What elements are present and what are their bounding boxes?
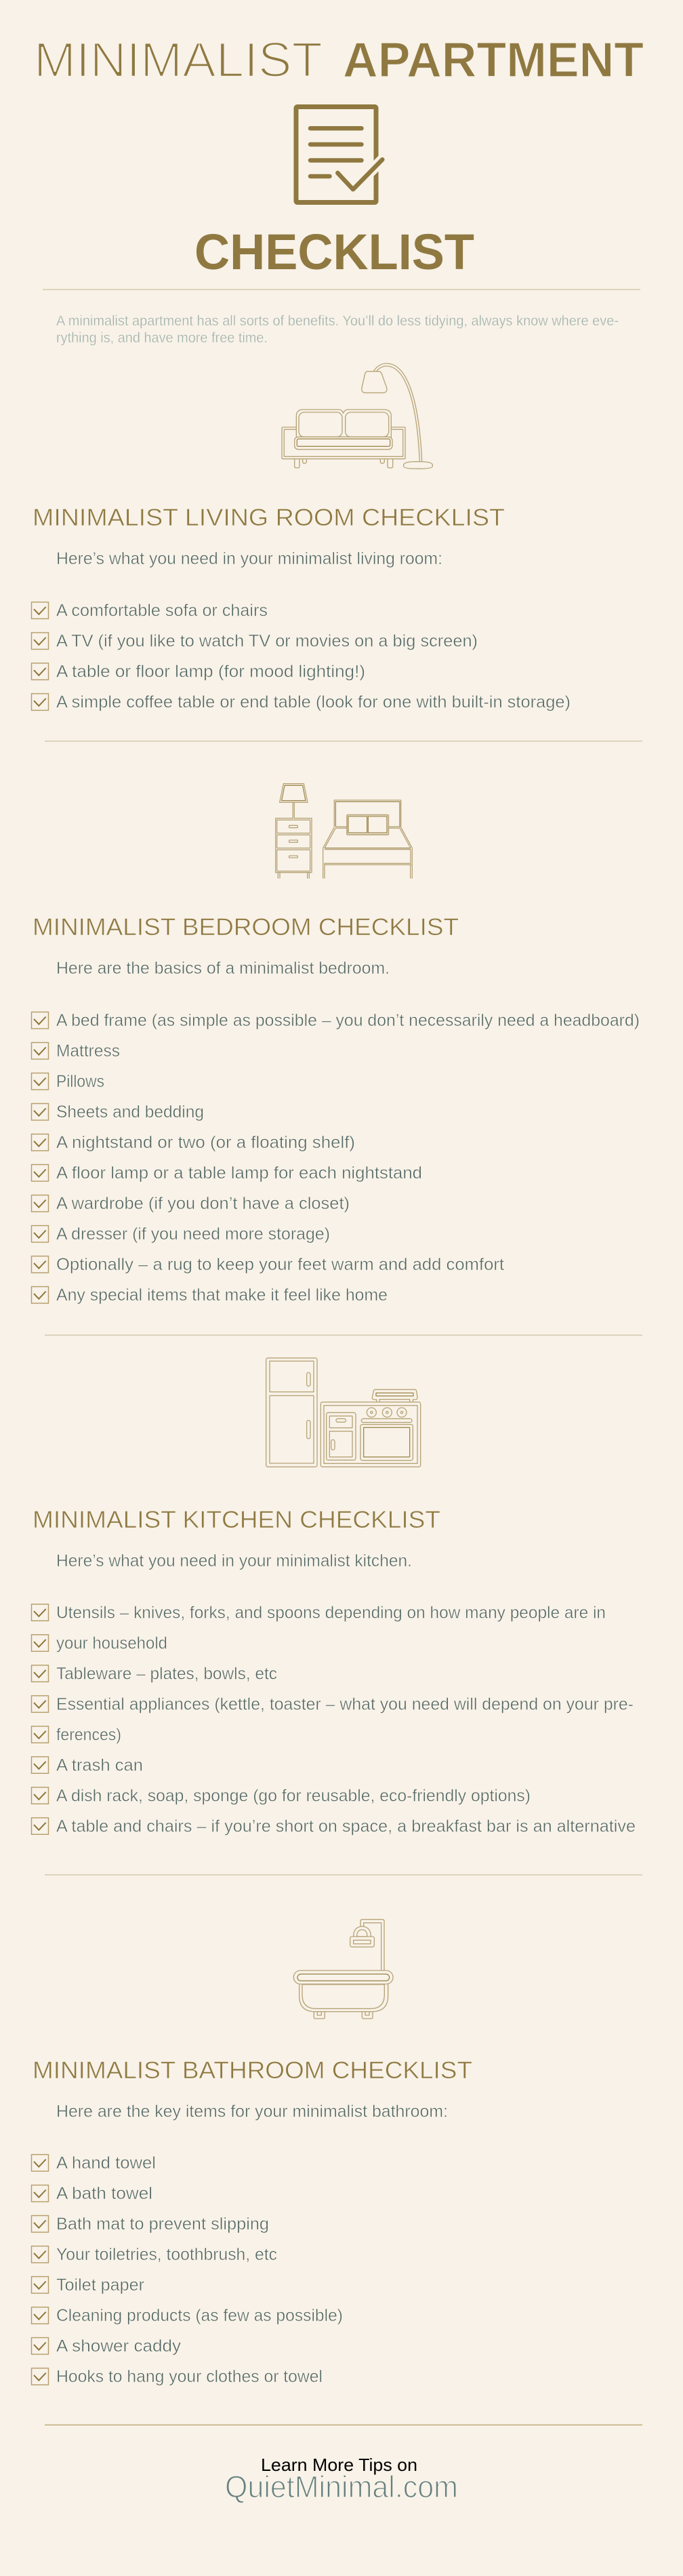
list: bedroom: A bed frame (as simple as possible – you don’t necessarily need a headboard) bbox=[56, 1011, 640, 1030]
list: kitchen: your household bbox=[56, 1633, 167, 1652]
list: kitchen: A trash can bbox=[56, 1756, 143, 1775]
intro text: rything is, and have more free time. bbox=[56, 330, 268, 346]
subheading: bedroom: Here are the basics of a minimalist bedroom. bbox=[56, 959, 390, 978]
list: kitchen: Essential appliances (kettle, toaster – what you need will depend on your pre- bbox=[56, 1695, 634, 1713]
footer: learn more: QuietMinimal.com bbox=[225, 2470, 458, 2504]
list: bathroom: Bath mat to prevent slipping bbox=[56, 2215, 269, 2234]
list: kitchen: Utensils – knives, forks, and spoons depending on how many people are in bbox=[56, 1603, 606, 1622]
list: living room: A TV (if you like to watch TV or movies on a big screen) bbox=[56, 632, 478, 651]
footer: learn more bbox=[225, 2455, 458, 2504]
list: living room: A simple coffee table or end table (look for one with built-in storage) bbox=[56, 693, 571, 712]
list: living room bbox=[31, 601, 571, 712]
title: minimalist apartment: APARTMENT bbox=[343, 33, 644, 87]
list: bedroom: A nightstand or two (or a floating shelf) bbox=[56, 1133, 355, 1152]
icon: checklist document bbox=[296, 107, 382, 202]
list: bedroom: Optionally – a rug to keep your feet warm and add comfort bbox=[56, 1255, 504, 1274]
subheading: kitchen: Here’s what you need in your minimalist kitchen. bbox=[56, 1551, 412, 1570]
list: bedroom: Pillows bbox=[56, 1072, 104, 1091]
list: bathroom: A hand towel bbox=[56, 2154, 156, 2173]
list: bathroom: A bath towel bbox=[56, 2184, 152, 2203]
subheading: bathroom: Here are the key items for your minimalist bathroom: bbox=[56, 2102, 448, 2121]
list: bathroom: Toilet paper bbox=[56, 2276, 144, 2295]
intro text: A minimalist apartment has all sorts of benefits. You’ll do less tidying, always know where eve- bbox=[56, 313, 619, 329]
list: living room: A comfortable sofa or chairs bbox=[56, 601, 268, 620]
intro text bbox=[56, 313, 619, 346]
heading: bedroom: MINIMALIST BEDROOM CHECKLIST bbox=[33, 914, 459, 940]
heading: bathroom: MINIMALIST BATHROOM CHECKLIST bbox=[33, 2057, 472, 2084]
list: living room: A table or floor lamp (for mood lighting!) bbox=[56, 662, 365, 681]
list: kitchen: A dish rack, soap, sponge (go for reusable, eco-friendly options) bbox=[56, 1786, 531, 1805]
icon: bathtub with shower bbox=[293, 1920, 393, 2019]
list: bathroom: A shower caddy bbox=[56, 2337, 182, 2356]
list: kitchen: Tableware – plates, bowls, etc bbox=[56, 1664, 277, 1683]
list: bedroom bbox=[31, 1011, 640, 1305]
title: checklist: CHECKLIST bbox=[194, 224, 474, 280]
heading: kitchen: MINIMALIST KITCHEN CHECKLIST bbox=[33, 1507, 440, 1533]
icon: nightstand and bed bbox=[276, 784, 412, 879]
list: bedroom: Sheets and bedding bbox=[56, 1103, 204, 1122]
icon: fridge and stove bbox=[266, 1358, 421, 1467]
list: bathroom: Cleaning products (as few as possible) bbox=[56, 2306, 343, 2325]
list: bedroom: A dresser (if you need more storage) bbox=[56, 1225, 330, 1244]
list: bedroom: A wardrobe (if you don’t have a closet) bbox=[56, 1194, 350, 1213]
list: kitchen: ferences) bbox=[56, 1725, 121, 1744]
list: bathroom: Your toiletries, toothbrush, etc bbox=[56, 2245, 277, 2264]
title: minimalist apartment: MINIMALIST bbox=[34, 33, 323, 87]
list: kitchen bbox=[31, 1603, 636, 1836]
list: bedroom: A floor lamp or a table lamp for each nightstand bbox=[56, 1164, 422, 1183]
list: bathroom bbox=[31, 2154, 343, 2386]
icon: sofa and floor lamp bbox=[282, 363, 432, 469]
footer: learn more: Learn More Tips on bbox=[261, 2455, 417, 2475]
list: bedroom: Mattress bbox=[56, 1042, 120, 1061]
subheading: living room: Here’s what you need in your minimalist living room: bbox=[56, 549, 442, 568]
list: bedroom: Any special items that make it feel like home bbox=[56, 1286, 388, 1305]
heading: living room: MINIMALIST LIVING ROOM CHECKLIST bbox=[33, 504, 505, 531]
title: minimalist apartment bbox=[34, 33, 644, 87]
list: bathroom: Hooks to hang your clothes or towel bbox=[56, 2367, 323, 2386]
list: kitchen: A table and chairs – if you’re short on space, a breakfast bar is an alternative bbox=[56, 1817, 636, 1836]
